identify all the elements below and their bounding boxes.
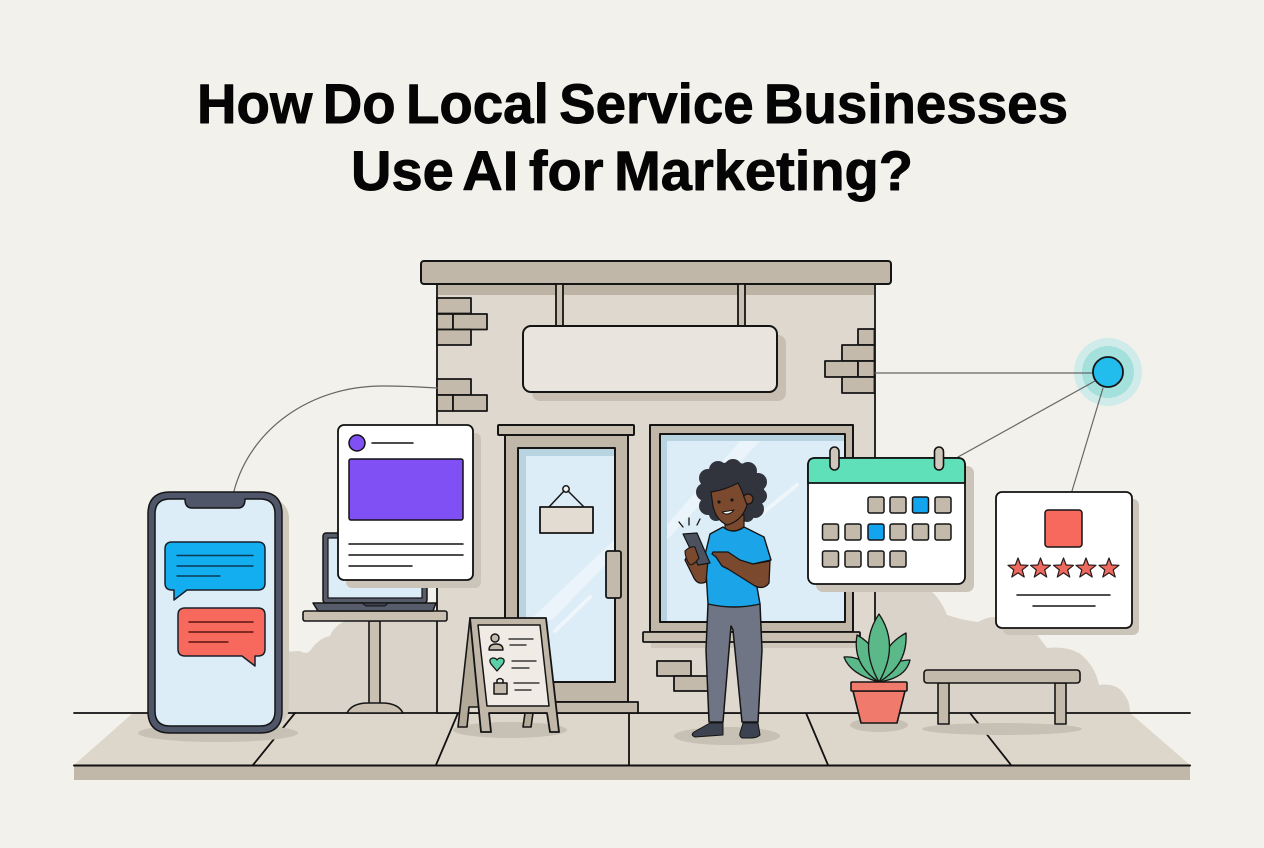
- post text lines: [349, 443, 463, 566]
- pointing arm: [712, 552, 770, 587]
- phone body: [148, 492, 282, 733]
- phone hand arm: [685, 550, 708, 583]
- sidewalk: [74, 713, 1190, 780]
- title: [197, 72, 1068, 202]
- smartphone with chat: [138, 492, 298, 742]
- facial features: [717, 498, 734, 514]
- pot: [851, 682, 907, 723]
- blue chat bubble: [165, 542, 265, 600]
- door: [497, 425, 638, 713]
- sign frame: [470, 618, 559, 732]
- shoes: [692, 723, 760, 738]
- woman with phone: [674, 459, 780, 745]
- calendar header: [808, 458, 965, 483]
- bench: [922, 670, 1082, 735]
- AI node: [1093, 357, 1123, 387]
- hair: [696, 459, 767, 522]
- bag icon: [494, 678, 507, 694]
- a-frame sidewalk sign: [453, 618, 567, 738]
- heart icon: [490, 658, 504, 671]
- storefront building: [421, 261, 891, 713]
- pants: [706, 604, 762, 722]
- sign text lines: [509, 639, 539, 690]
- table: [303, 611, 447, 713]
- fingers: [685, 547, 699, 565]
- post image: [349, 459, 463, 520]
- AI node glow: [1074, 338, 1142, 406]
- avatar: [349, 435, 365, 451]
- t-shirt: [705, 527, 771, 607]
- roof shadow: [438, 285, 874, 295]
- person icon: [489, 634, 503, 650]
- handheld phone: [683, 533, 710, 565]
- shop window: [643, 425, 866, 648]
- building wall: [437, 284, 875, 713]
- title: How Do Local Service Businesses: [197, 72, 1068, 135]
- laptop: [313, 533, 436, 611]
- background bush silhouettes: [282, 586, 1130, 713]
- brick clusters: [437, 298, 874, 691]
- table with laptop: [303, 533, 447, 713]
- sign hangers: [556, 284, 745, 326]
- title: Use AI for Marketing?: [351, 139, 913, 202]
- profile square: [1045, 510, 1082, 547]
- door handle: [606, 551, 621, 598]
- connector lines to AI node: [234, 373, 1103, 491]
- binder rings: [830, 447, 944, 470]
- blank store sign: [523, 326, 786, 401]
- notification sparks: [679, 518, 700, 527]
- door hanging sign: [540, 486, 593, 533]
- potted plant: [844, 614, 910, 732]
- calendar day cells: [822, 497, 951, 567]
- sign board: [478, 625, 549, 706]
- sign legs: [458, 618, 533, 727]
- social post card: [338, 425, 481, 588]
- leaves: [844, 614, 910, 682]
- five stars: [1008, 558, 1119, 577]
- red chat bubble: [178, 608, 265, 666]
- roof cornice: [421, 261, 891, 284]
- review card: [996, 492, 1139, 635]
- calendar card: [808, 447, 974, 592]
- neck and face: [711, 483, 753, 534]
- review text lines: [1017, 595, 1110, 606]
